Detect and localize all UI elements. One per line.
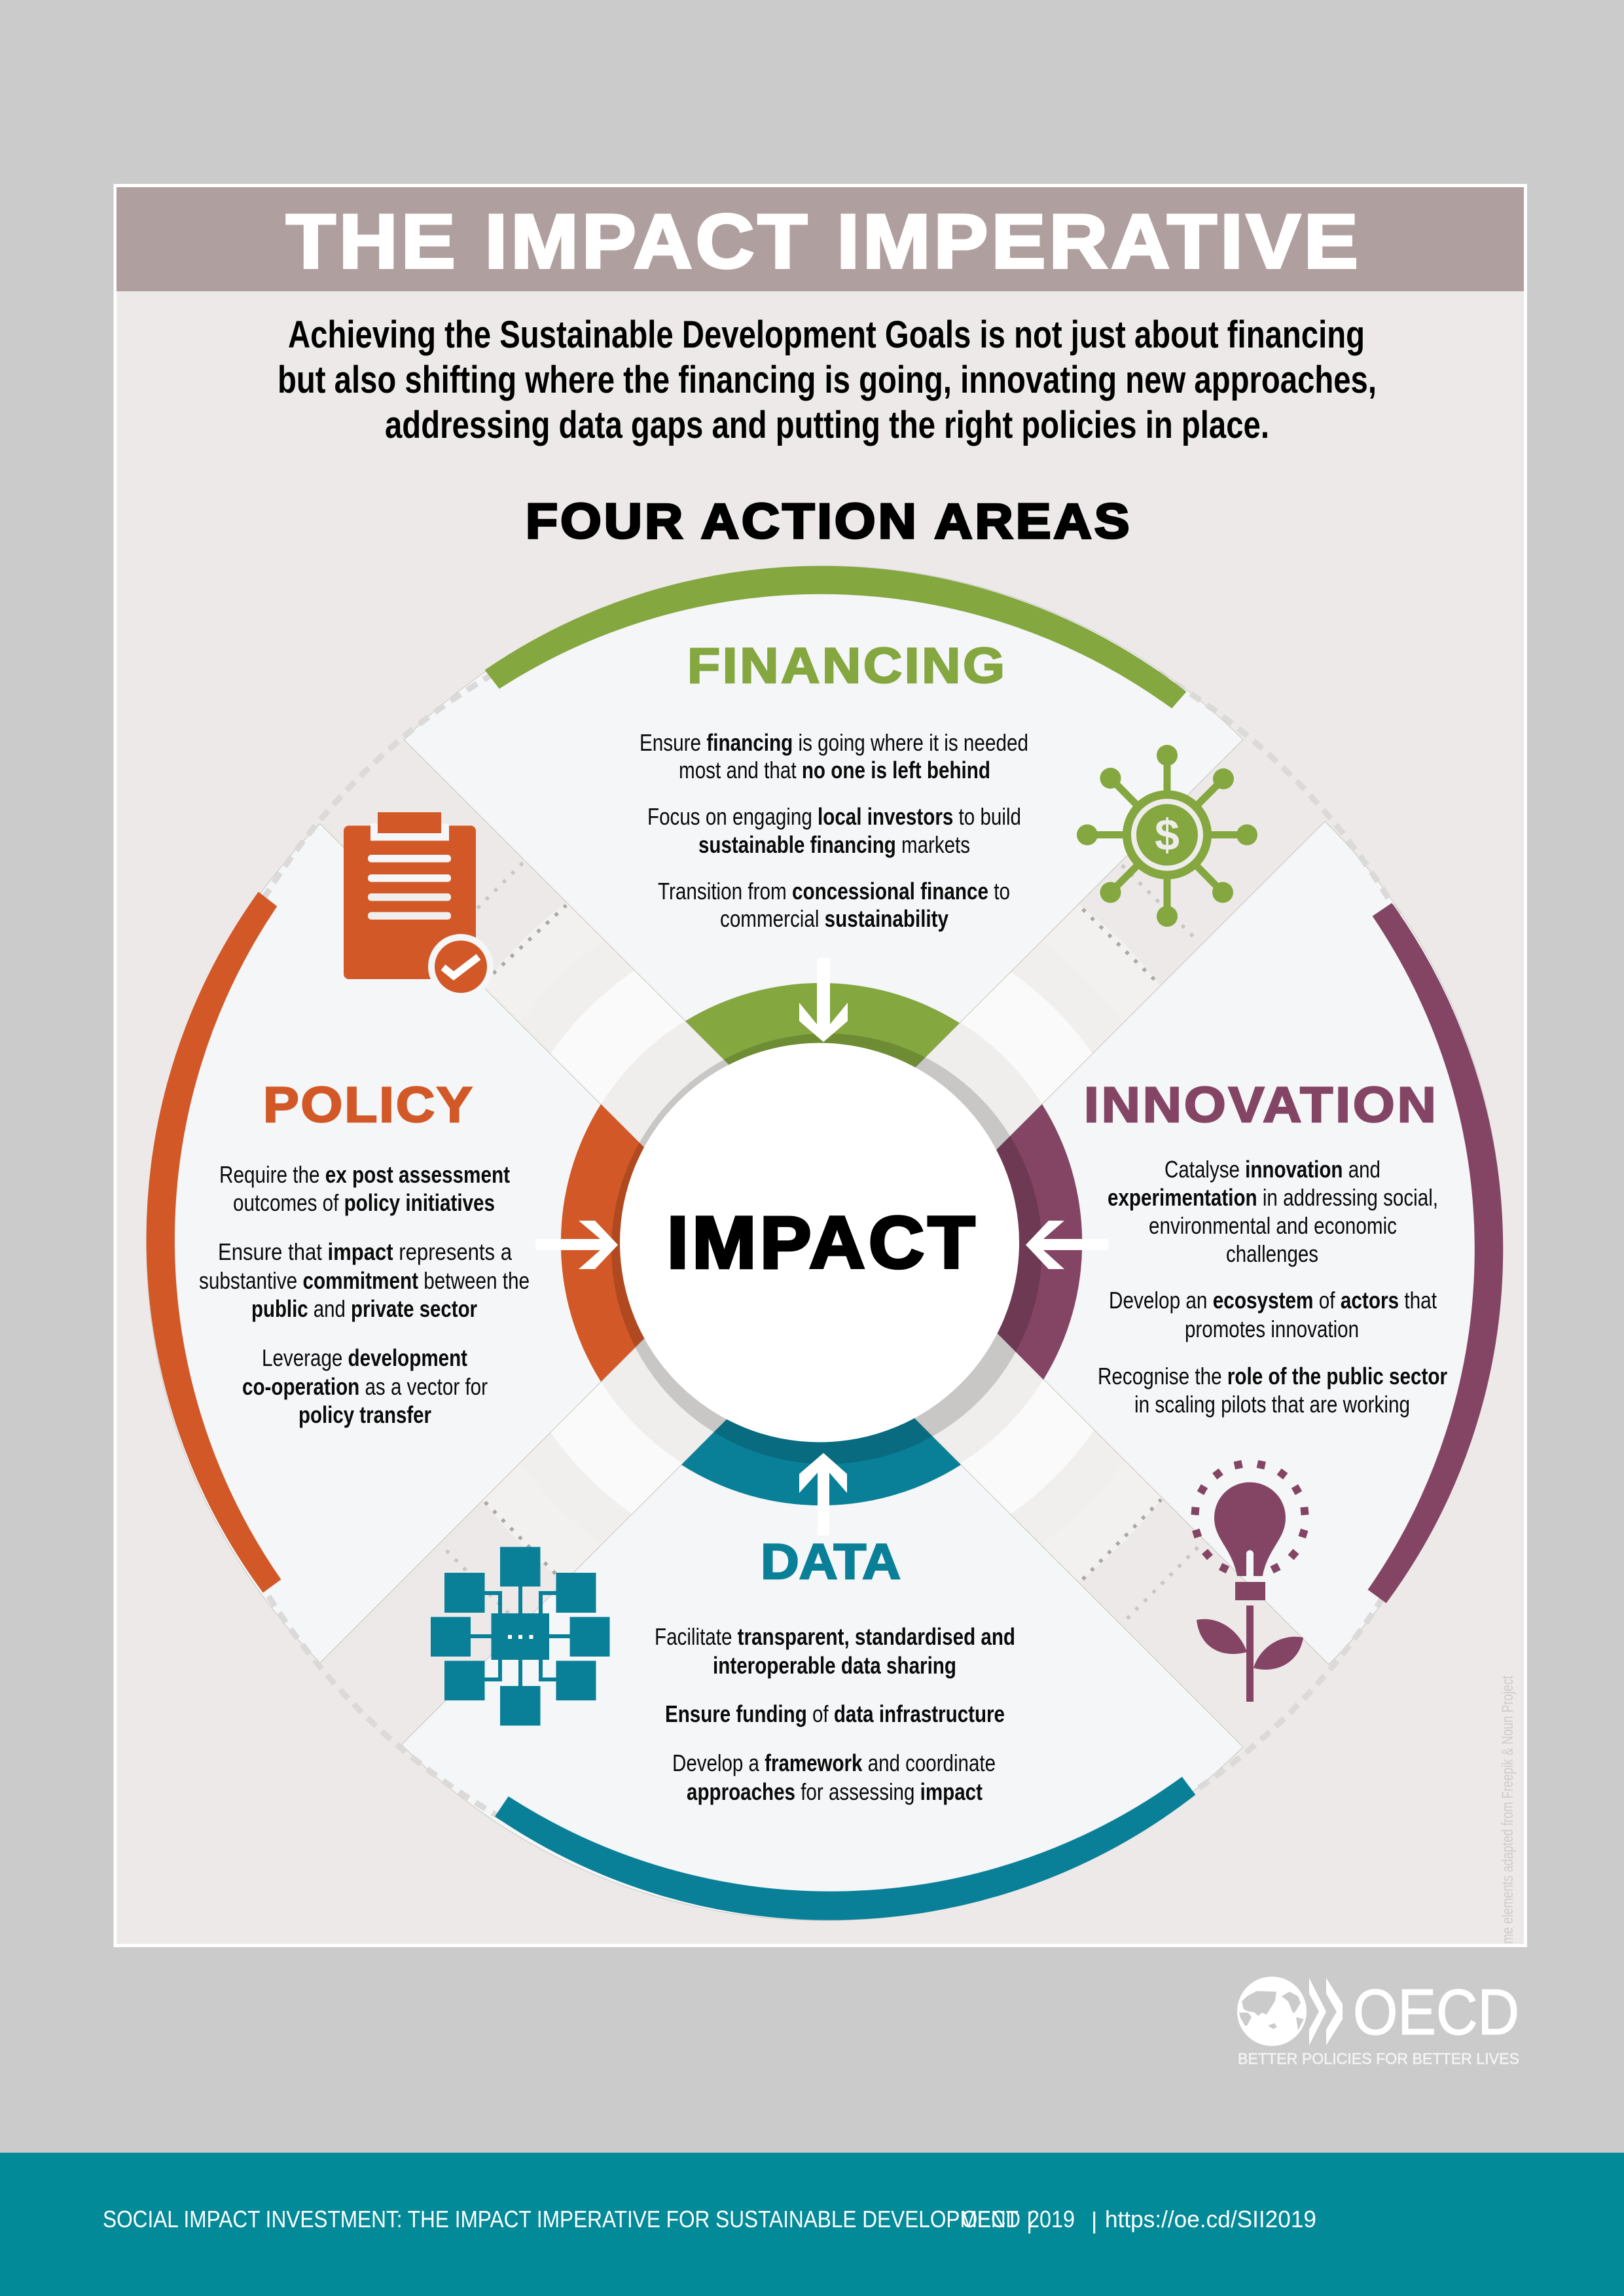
- text block: policy: substantive commitment between the: [199, 1267, 530, 1294]
- text block: policy: Leverage development: [262, 1344, 467, 1371]
- inner wedge: innovation: [905, 1104, 1082, 1380]
- logo: OECD: BETTER POLICIES FOR BETTER LIVES: [1238, 2050, 1519, 2068]
- heading: four action areas: FOUR ACTION AREAS: [526, 494, 1129, 548]
- text block: data: Ensure funding of data infrastructure: [665, 1700, 1005, 1727]
- outer arc: financing: [486, 567, 1185, 708]
- text block: policy: outcomes of policy initiatives: [233, 1189, 495, 1216]
- title band: THE IMPACT IMPERATIVE: [286, 198, 1358, 284]
- text block: policy: [199, 1161, 530, 1428]
- panel: main card: [115, 186, 1525, 1945]
- text block: innovation: promotes innovation: [1185, 1316, 1359, 1342]
- intro text: Achieving the Sustainable Development Goals is not just about financing: [288, 314, 1365, 356]
- logo: OECD: [1237, 1976, 1519, 2068]
- title band: [117, 187, 1524, 291]
- inner wedge: data: [681, 1325, 961, 1505]
- footer citation: SOCIAL IMPACT INVESTMENT: THE IMPACT IMPERATIVE FOR SUSTAINABLE DEVELOPMENT: [103, 2206, 1019, 2233]
- text block: data: [655, 1623, 1015, 1805]
- text block: policy: policy transfer: [298, 1401, 431, 1428]
- footer link: |: [1091, 2207, 1097, 2234]
- text block: innovation: in scaling pilots that are working: [1134, 1391, 1410, 1418]
- heading: data: DATA: [761, 1534, 901, 1590]
- text block: policy: co-operation as a vector for: [242, 1373, 488, 1400]
- intro text: but also shifting where the financing is going, innovating new approaches,: [278, 359, 1377, 401]
- text block: financing: sustainable financing markets: [698, 831, 970, 858]
- footer link: 2019: [1028, 2206, 1075, 2233]
- text block: data: approaches for assessing impact: [687, 1778, 983, 1805]
- inner wedge: financing: [685, 983, 960, 1159]
- text block: financing: Transition from concessional finance to: [658, 878, 1010, 905]
- footer link: OECD: [962, 2206, 1020, 2233]
- intro text: addressing data gaps and putting the right policies in place.: [385, 404, 1269, 446]
- text block: financing: most and that no one is left behind: [679, 757, 990, 783]
- image credit: Some elements adapted from Freepik & Noun Project: [1499, 1676, 1517, 1958]
- logo: OECD: OECD: [1353, 1976, 1519, 2048]
- arrow: policy: [535, 1221, 618, 1269]
- text block: innovation: [1098, 1156, 1447, 1418]
- arrow: financing: [799, 958, 848, 1042]
- concentric bands between quadrants: [396, 817, 1247, 1668]
- text block: innovation: Catalyse innovation and: [1164, 1156, 1380, 1183]
- footer link: |: [1026, 2207, 1032, 2234]
- text block: financing: [640, 729, 1028, 932]
- outer arc: innovation: [1369, 904, 1502, 1602]
- heading: innovation: INNOVATION: [1084, 1077, 1436, 1132]
- central circle shadow: [611, 1033, 1042, 1464]
- text block: innovation: Recognise the role of the public sector: [1098, 1363, 1447, 1390]
- intro text: [278, 314, 1377, 446]
- icon: data network: [431, 1547, 610, 1725]
- icon: financing network: $: [1155, 810, 1180, 860]
- text block: financing: Ensure financing is going where it is needed: [640, 729, 1028, 756]
- text block: financing: commercial sustainability: [720, 905, 948, 932]
- text block: financing: Focus on engaging local investors to build: [647, 803, 1021, 830]
- arrow: data: [799, 1453, 847, 1535]
- outer arc: policy: [147, 893, 280, 1592]
- footer link: [962, 2206, 1316, 2234]
- text block: policy: Ensure that impact represents a: [218, 1238, 513, 1265]
- centre label: impact: IMPACT: [667, 1202, 975, 1283]
- text block: policy: public and private sector: [251, 1295, 477, 1322]
- footer link: https://oe.cd/SII2019: [1105, 2206, 1316, 2233]
- arrow: innovation: [1026, 1221, 1108, 1269]
- dashed outer circle: [166, 584, 1486, 1903]
- text block: data: Develop a framework and coordinate: [672, 1749, 996, 1776]
- icon: light bulb plant: [1191, 1460, 1309, 1702]
- text block: innovation: Develop an ecosystem of actors that: [1109, 1287, 1437, 1314]
- icon: clipboard: [344, 812, 494, 999]
- text block: data: interoperable data sharing: [713, 1652, 956, 1679]
- text block: innovation: challenges: [1226, 1240, 1318, 1267]
- central circle: [620, 1043, 1019, 1443]
- text block: innovation: environmental and economic: [1149, 1212, 1397, 1239]
- inner wedge: policy: [561, 1104, 740, 1382]
- quadrant panels: [147, 566, 1502, 1920]
- outer arc: data: [496, 1778, 1195, 1920]
- text block: data: Facilitate transparent, standardised and: [655, 1623, 1015, 1650]
- text block: policy: Require the ex post assessment: [219, 1161, 510, 1188]
- heading: financing: FINANCING: [687, 637, 1005, 693]
- dotted connector lines: [443, 862, 1202, 1630]
- footer band: [0, 2153, 1624, 2296]
- heading: policy: POLICY: [263, 1077, 473, 1132]
- icon: financing network: [1077, 745, 1257, 927]
- text block: innovation: experimentation in addressing social,: [1108, 1184, 1438, 1211]
